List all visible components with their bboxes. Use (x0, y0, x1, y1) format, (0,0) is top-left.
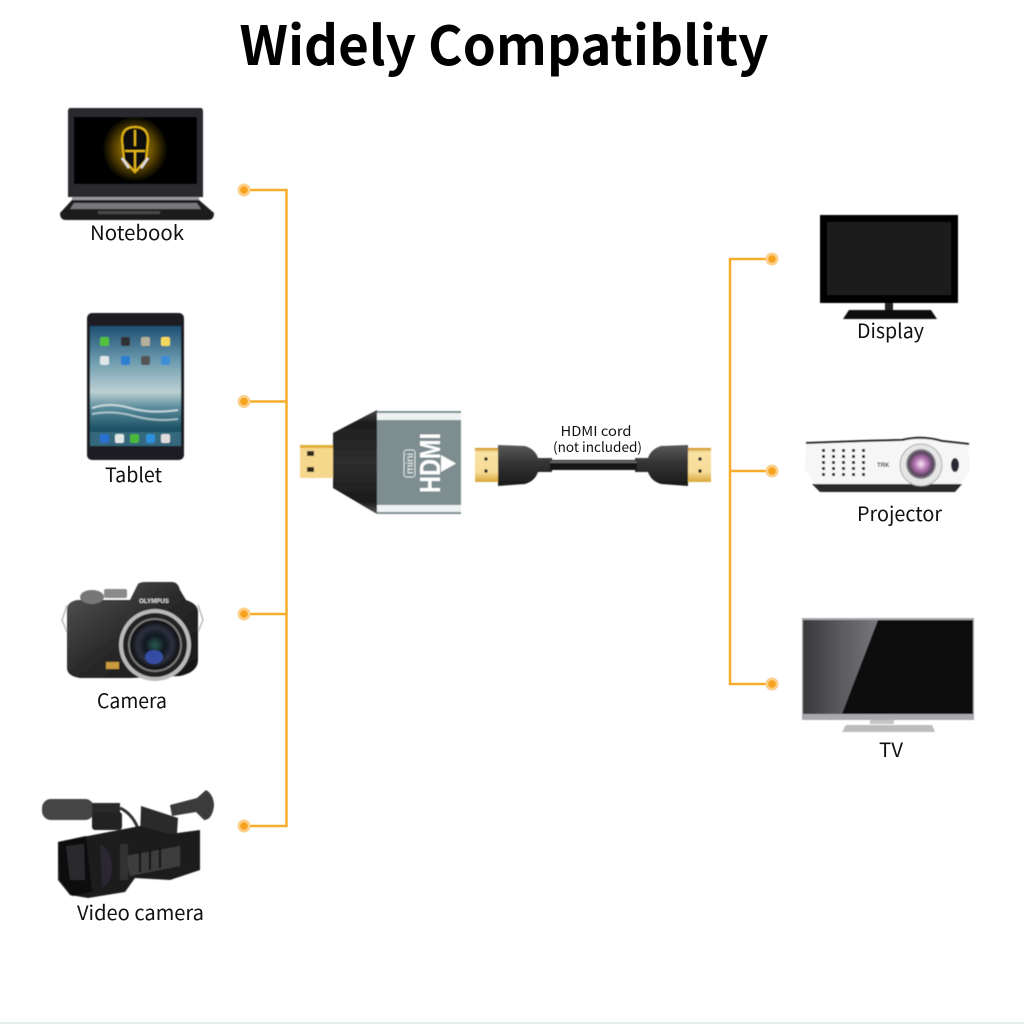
dark taper (333, 410, 377, 514)
icon: projector: TRK (877, 463, 890, 469)
label: Projector: Projector (857, 498, 942, 527)
label: Tablet: Tablet (105, 459, 162, 488)
icon: notebook (60, 108, 214, 220)
HDMI cord (475, 445, 711, 486)
bottom edge strip (0, 1022, 1024, 1024)
adapter logo: HDMI (415, 433, 447, 493)
label: not included: (not included) (553, 436, 642, 456)
icon: video camera (42, 790, 214, 898)
label: Display: Display (857, 315, 925, 344)
right connector lines (730, 252, 778, 690)
icon: camera: OLYMPUS (139, 598, 170, 605)
title: Widely Compatiblity (240, 2, 769, 81)
label: TV: TV (879, 734, 904, 763)
left connector lines (238, 184, 286, 832)
gold mini plug (300, 445, 334, 478)
icon: tablet (87, 313, 184, 460)
adapter logo (404, 433, 456, 493)
icon: TV (802, 618, 974, 732)
grey front (377, 411, 461, 514)
label: HDMI cord: HDMI cord (560, 420, 632, 440)
icon: projector (805, 438, 970, 492)
icon: display (820, 215, 958, 319)
mini HDMI adapter (300, 410, 461, 514)
label: Video camera: Video camera (77, 897, 204, 926)
icon: camera (62, 582, 203, 681)
label: Camera: Camera (97, 685, 167, 714)
label: Notebook: Notebook (90, 217, 184, 246)
adapter logo: mini (405, 453, 416, 474)
